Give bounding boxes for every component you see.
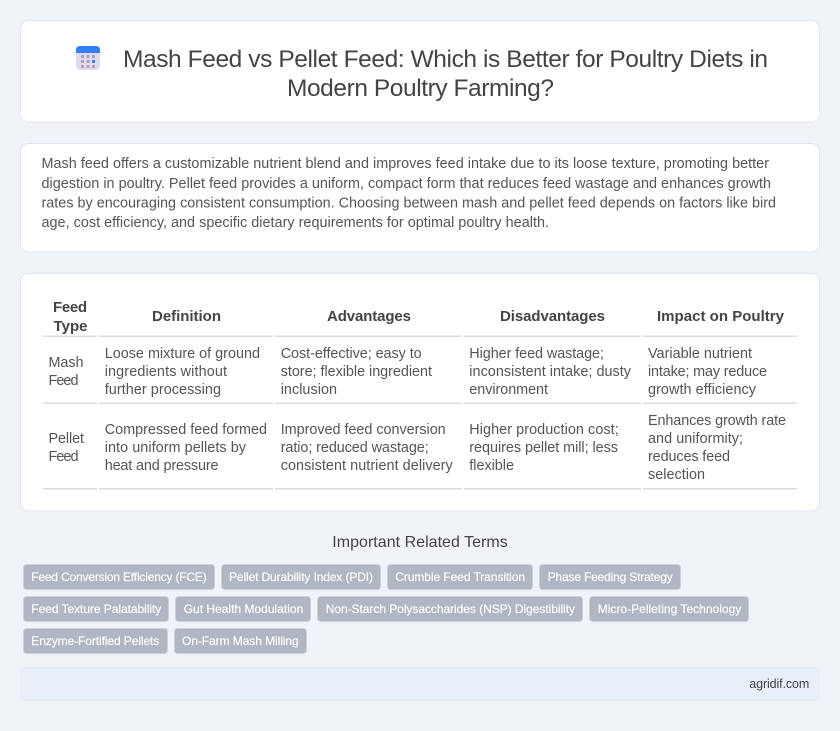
table row: mash feed: inconsistent intake; dusty bbox=[469, 364, 632, 380]
title: Modern Poultry Farming? bbox=[287, 75, 554, 102]
panel: header bbox=[20, 20, 820, 122]
panel: related term tags: Pellet Durability Index (PDI) bbox=[229, 570, 373, 584]
table row: mash feed: intake; may reduce bbox=[648, 364, 767, 380]
table row: pellet feed bbox=[48, 413, 786, 483]
table header row: Definition bbox=[152, 308, 221, 325]
footer: agridif.com bbox=[749, 677, 809, 691]
table row: pellet feed: selection bbox=[648, 467, 705, 483]
intro text block: Mash feed offers a customizable nutrient blend and improves feed intake due to its loose texture, promoting better bbox=[42, 156, 769, 172]
table row: pellet feed: requires pellet mill; less bbox=[469, 440, 618, 456]
panel: related term tags: Phase Feeding Strategy bbox=[548, 570, 673, 584]
panel: related term tags: Feed Texture Palatability bbox=[31, 602, 161, 616]
title bbox=[123, 46, 768, 102]
panel: related term tags: Non-Starch Polysaccharides (NSP) Digestibility bbox=[326, 602, 575, 616]
table row: pellet feed: reduces feed bbox=[648, 449, 730, 465]
intro text block: rates by encouraging consistent consumption. Choosing between mash and pellet feed depends on factors like bird bbox=[42, 196, 776, 212]
table row: mash feed: environment bbox=[469, 382, 548, 398]
table row: pellet feed: Improved feed conversion bbox=[281, 422, 446, 438]
title: Mash Feed vs Pellet Feed: Which is Better for Poultry Diets in bbox=[123, 46, 768, 73]
table row: mash feed: Higher feed wastage; bbox=[469, 346, 604, 362]
table row: pellet feed: and uniformity; bbox=[648, 431, 743, 447]
table header row: Disadvantages bbox=[500, 308, 605, 325]
table row: pellet feed: Pellet bbox=[48, 431, 84, 447]
table row: mash feed: Variable nutrient bbox=[648, 346, 752, 362]
table rules bbox=[43, 336, 797, 490]
table header row: Type bbox=[54, 318, 88, 335]
table header row: Feed bbox=[53, 299, 87, 316]
table row: mash feed: Cost-effective; easy to bbox=[281, 346, 422, 362]
table row: mash feed: Loose mixture of ground bbox=[105, 346, 260, 362]
table row: mash feed: Mash bbox=[48, 355, 84, 371]
table row: pellet feed: consistent nutrient delivery bbox=[281, 458, 453, 474]
table header row: Impact on Poultry bbox=[657, 308, 785, 325]
panel: comparison table bbox=[20, 274, 820, 511]
heading: important related terms: Important Related Terms bbox=[332, 534, 508, 551]
table row: pellet feed: flexible bbox=[469, 458, 514, 474]
panel: related term tags: Crumble Feed Transition bbox=[395, 570, 525, 584]
intro text block bbox=[42, 156, 776, 231]
table row: pellet feed: Feed bbox=[48, 449, 78, 465]
footer bbox=[20, 667, 820, 701]
panel: related term tags: Micro-Pelleting Technology bbox=[598, 602, 741, 616]
table row: pellet feed: Compressed feed formed bbox=[105, 422, 267, 438]
table row: mash feed: growth efficiency bbox=[648, 382, 757, 398]
intro text block: digestion in poultry. Pellet feed provides a uniform, compact form that reduces feed wastage and enhances growth bbox=[42, 176, 771, 192]
table row: mash feed: further processing bbox=[105, 382, 221, 398]
panel: related term tags: On-Farm Mash Milling bbox=[182, 634, 299, 648]
table row: pellet feed: into uniform pellets by bbox=[105, 440, 247, 456]
table row: pellet feed: ratio; reduced wastage; bbox=[281, 440, 429, 456]
icon: calendar bbox=[76, 46, 100, 70]
panel: related term tags: Feed Conversion Efficiency (FCE) bbox=[31, 570, 207, 584]
table row: mash feed: store; flexible ingredient bbox=[281, 364, 432, 380]
panel: related term tags: Gut Health Modulation bbox=[184, 602, 303, 616]
table header row: Advantages bbox=[327, 308, 411, 325]
table row: mash feed: Feed bbox=[48, 373, 78, 389]
table row: pellet feed: heat and pressure bbox=[105, 458, 218, 474]
table row: pellet feed: Higher production cost; bbox=[469, 422, 619, 438]
table row: mash feed: inclusion bbox=[281, 382, 337, 398]
table header row bbox=[53, 299, 785, 335]
table row: pellet feed: Enhances growth rate bbox=[648, 413, 786, 429]
table row: mash feed bbox=[48, 346, 767, 398]
table row: mash feed: ingredients without bbox=[105, 364, 227, 380]
panel: related term tags bbox=[24, 564, 748, 654]
intro text block: age, cost efficiency, and specific dietary requirements for optimal poultry health. bbox=[42, 215, 549, 231]
panel: related term tags: Enzyme-Fortified Pellets bbox=[31, 634, 159, 648]
panel: intro bbox=[20, 144, 820, 252]
